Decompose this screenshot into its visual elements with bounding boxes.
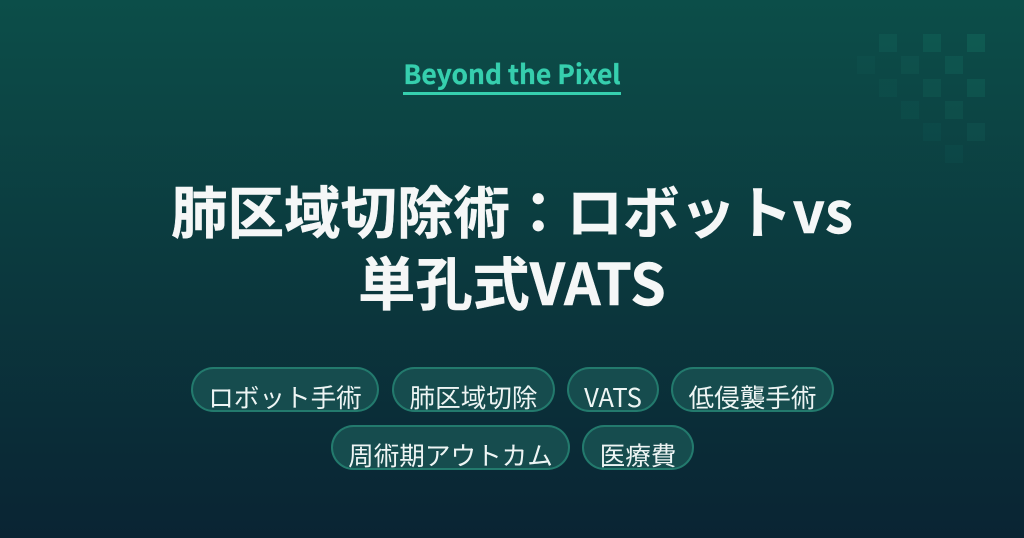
tag list — [191, 367, 834, 472]
title — [171, 168, 853, 322]
tag: ロボット手術 — [191, 367, 379, 412]
tag: 低侵襲手術: 低侵襲手術 — [688, 378, 816, 414]
tag: 低侵襲手術 — [671, 367, 834, 412]
tag: VATS — [567, 367, 659, 412]
tag: VATS: VATS — [584, 378, 642, 414]
tag: 肺区域切除: 肺区域切除 — [410, 378, 537, 414]
tag: 周術期アウトカム: 周術期アウトカム — [348, 436, 553, 472]
title: 肺区域切除術：ロボットvs — [171, 168, 853, 250]
tag: ロボット手術: ロボット手術 — [208, 378, 362, 414]
brand label: Beyond the Pixel: Beyond the Pixel — [403, 53, 621, 92]
tag: 肺区域切除 — [392, 367, 555, 412]
tag: 医療費 — [582, 425, 694, 470]
title: 単孔式VATS — [358, 240, 666, 322]
decorative square pattern — [879, 34, 985, 119]
tag: 医療費: 医療費 — [600, 436, 676, 472]
tag: 周術期アウトカム — [331, 425, 570, 470]
